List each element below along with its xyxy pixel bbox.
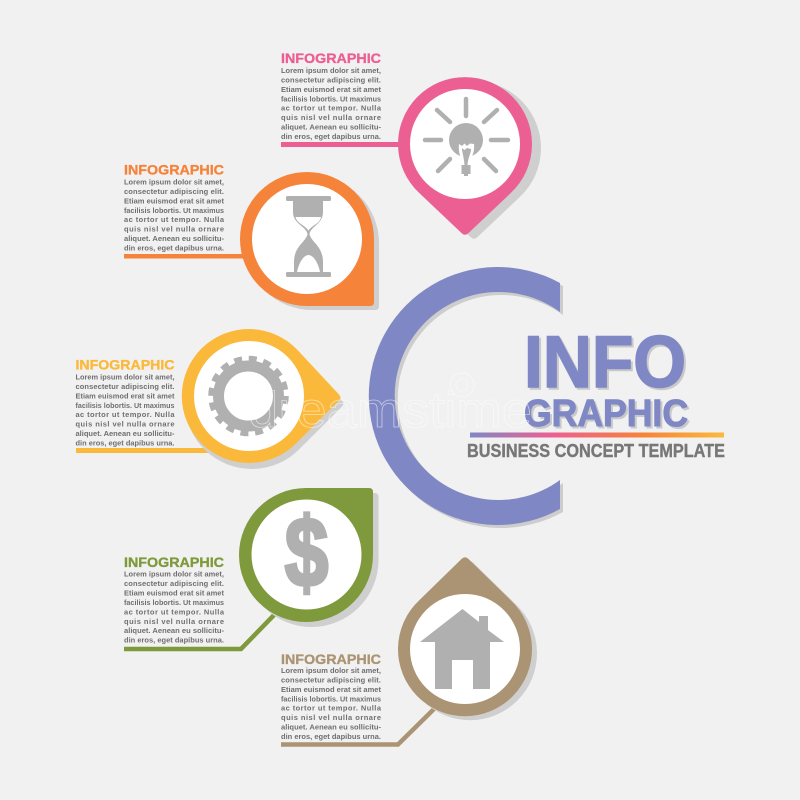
pink text block: facilisis lobortis. Ut maximus	[281, 94, 381, 103]
pink connector line	[281, 142, 403, 147]
green text block: Lorem ipsum dolor sit amet,	[124, 570, 224, 579]
brown text block: din eros, eget dapibus urna.	[281, 732, 381, 741]
orange text block: din eros, eget dapibus urna.	[124, 244, 224, 252]
pink text block: aliquet. Aenean eu sollicitu-	[281, 123, 382, 132]
orange text block: Etiam euismod erat sit amet	[124, 196, 224, 205]
green text block: din eros, eget dapibus urna.	[124, 636, 224, 645]
panel: yellow settings	[76, 329, 344, 469]
orange text block: consectetur adipiscing elit.	[124, 187, 224, 196]
yellow text block: Etiam euismod erat sit amet	[76, 391, 175, 400]
brown text block	[281, 652, 382, 741]
orange text block: aliquet. Aenean eu sollicitu-	[124, 234, 225, 243]
yellow text block: ac tortor ut tempor. Nulla	[76, 410, 175, 419]
icon: light bulb	[425, 99, 508, 176]
green text block: quis nisl vel nulla ornare	[124, 617, 224, 626]
green text block: ac tortor ut tempor. Nulla	[124, 607, 225, 616]
icon: house	[420, 609, 504, 689]
brown connector line	[281, 708, 435, 744]
orange connector line	[124, 254, 246, 258]
brown text block: facilisis lobortis. Ut maximus	[281, 694, 381, 703]
brown text block: quis nisl vel nulla ornare	[281, 713, 381, 722]
orange pin	[240, 172, 379, 310]
yellow text block: din eros, eget dapibus urna.	[76, 438, 174, 448]
brown text block: consectetur adipiscing elit.	[281, 675, 381, 684]
panel: green finance	[124, 488, 378, 649]
pink text block: INFOGRAPHIC	[281, 51, 381, 67]
brown text block: aliquet. Aenean eu sollicitu-	[281, 723, 382, 732]
panel: orange time	[124, 162, 379, 310]
pink text block: ac tortor ut tempor. Nulla	[281, 104, 382, 113]
yellow text block	[76, 358, 175, 448]
orange text block: INFOGRAPHIC	[124, 162, 224, 178]
central C ring	[369, 267, 563, 528]
panel: pink idea	[281, 51, 541, 239]
panel: brown home	[281, 557, 537, 744]
green pin	[239, 488, 378, 627]
yellow text block: INFOGRAPHIC	[76, 358, 174, 374]
orange text block	[124, 162, 225, 252]
green text block: Etiam euismod erat sit amet	[124, 588, 224, 598]
green text block: consectetur adipiscing elit.	[124, 579, 224, 588]
brown pin	[398, 557, 537, 720]
orange text block: quis nisl vel nulla ornare	[124, 225, 224, 234]
icon: dollar sign: $	[285, 498, 328, 607]
green text block: facilisis lobortis. Ut maximus	[124, 598, 224, 607]
orange text block: ac tortor ut tempor. Nulla	[124, 215, 225, 224]
title: INFO: INFO	[524, 322, 686, 403]
green text block	[124, 555, 225, 645]
pink text block: consectetur adipiscing elit.	[281, 75, 381, 84]
icon: hourglass	[286, 196, 331, 277]
brown text block: INFOGRAPHIC	[281, 652, 381, 668]
yellow text block: quis nisl vel nulla ornare	[76, 420, 174, 429]
green text block: aliquet. Aenean eu sollicitu-	[124, 626, 225, 635]
pink text block: quis nisl vel nulla ornare	[281, 113, 381, 122]
orange text block: Lorem ipsum dolor sit amet,	[124, 178, 224, 186]
pink text block: din eros, eget dapibus urna.	[281, 132, 381, 141]
pink text block	[281, 51, 382, 141]
main title	[467, 322, 725, 461]
orange text block: facilisis lobortis. Ut maximus	[124, 206, 224, 215]
pink text block: Lorem ipsum dolor sit amet,	[281, 66, 381, 75]
yellow text block: consectetur adipiscing elit.	[76, 382, 174, 391]
yellow text block: Lorem ipsum dolor sit amet,	[76, 372, 174, 382]
title: GRAPHIC: GRAPHIC	[524, 393, 688, 435]
brown text block: Lorem ipsum dolor sit amet,	[281, 666, 381, 675]
yellow pin	[182, 329, 344, 469]
green connector line	[124, 613, 276, 649]
title: GRAPHIC: GRAPHIC	[526, 395, 690, 437]
pink pin	[398, 77, 541, 239]
green text block: INFOGRAPHIC	[124, 555, 224, 571]
title: INFO: INFO	[526, 324, 688, 405]
brown text block: Etiam euismod erat sit amet	[281, 685, 381, 694]
yellow text block: aliquet. Aenean eu sollicitu-	[76, 429, 175, 438]
yellow connector line	[76, 448, 216, 453]
gradient underline	[470, 432, 724, 438]
watermark: dreamstime	[248, 382, 532, 438]
icon: gear	[211, 358, 286, 434]
subtitle: BUSINESS CONCEPT TEMPLATE	[467, 441, 725, 461]
pink text block: Etiam euismod erat sit amet	[281, 85, 381, 94]
yellow text block: facilisis lobortis. Ut maximus	[76, 401, 174, 410]
brown text block: ac tortor ut tempor. Nulla	[281, 704, 382, 713]
